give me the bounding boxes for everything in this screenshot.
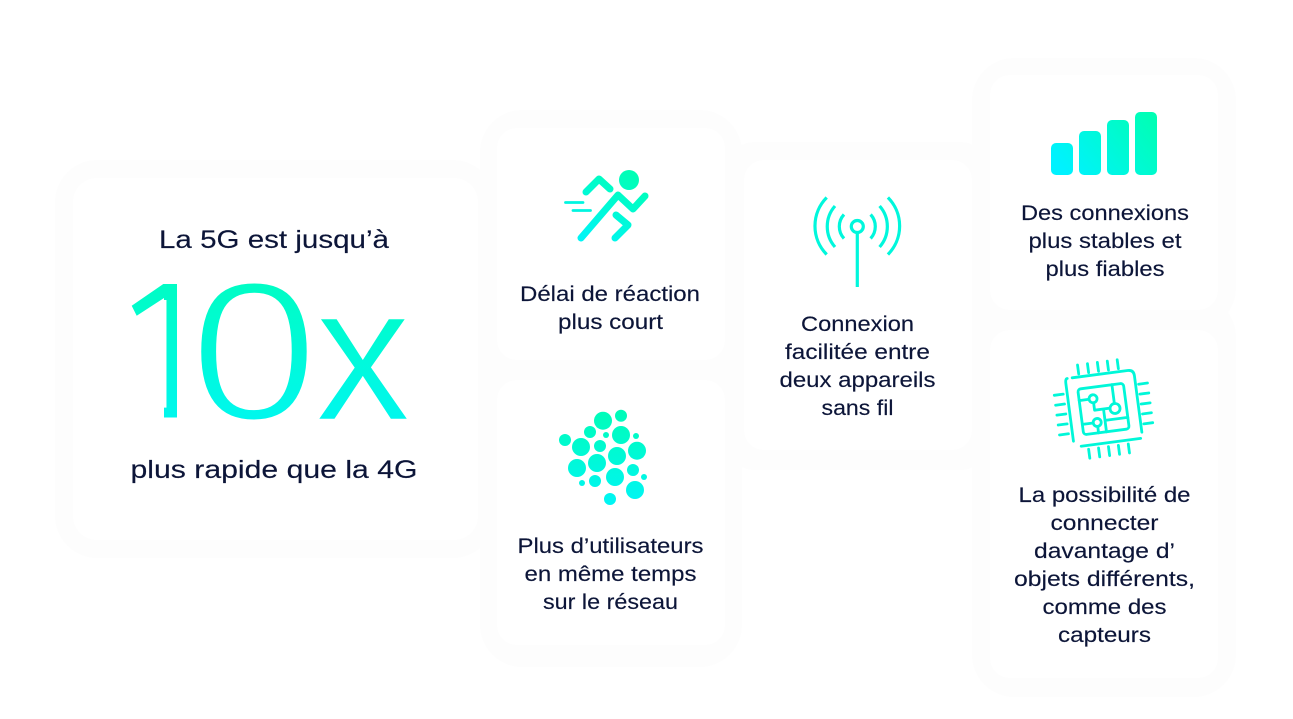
big number: 10x <box>100 240 411 462</box>
icon: antenna <box>815 198 900 287</box>
label: reaction time: Délai de réaction <box>520 282 700 306</box>
panel: easy connection <box>744 160 972 450</box>
panel: stable connections <box>990 75 1218 310</box>
label: easy connection: deux appareils <box>780 368 936 392</box>
panel: more users <box>497 380 725 645</box>
label: stable connections <box>1021 201 1189 281</box>
label: more users: en même temps <box>524 562 696 586</box>
big number: 10x: x <box>315 245 411 461</box>
icon: signal bars <box>1051 112 1157 175</box>
label: stable connections: plus fiables <box>1046 257 1164 281</box>
icon: microchip <box>1051 356 1156 462</box>
label: more objects: connecter <box>1050 511 1158 535</box>
label: more users: Plus d’utilisateurs <box>518 534 704 558</box>
label: more objects: objets différents, <box>1014 567 1195 591</box>
panel: more objects <box>990 330 1218 678</box>
panel: 10x speed <box>73 178 478 540</box>
icon: runner <box>566 170 645 238</box>
label: easy connection <box>780 312 936 420</box>
label: more objects: comme des <box>1042 595 1166 619</box>
label: more objects: davantage d’ <box>1034 539 1175 563</box>
label: more objects: capteurs <box>1058 623 1151 647</box>
icon: bubbles <box>559 410 647 505</box>
big number: 10x: 1 <box>105 240 234 462</box>
label: reaction time <box>520 282 700 334</box>
label: more users: sur le réseau <box>543 590 678 614</box>
label: easy connection: facilitée entre <box>785 340 930 364</box>
label: more objects <box>1014 483 1195 647</box>
label: easy connection: Connexion <box>801 312 914 336</box>
label: more users <box>518 534 704 614</box>
big number: 10x: 0 <box>189 240 319 462</box>
label: reaction time: plus court <box>558 310 663 334</box>
label: easy connection: sans fil <box>822 396 894 420</box>
panel: reaction time <box>497 128 725 360</box>
label: stable connections: Des connexions <box>1021 201 1189 225</box>
subheading: plus rapide que la 4G: plus rapide que la 4G <box>130 456 418 484</box>
heading: la 5G est jusqu'à: La 5G est jusqu’à <box>159 226 389 254</box>
label: more objects: La possibilité de <box>1018 483 1190 507</box>
label: stable connections: plus stables et <box>1028 229 1182 253</box>
